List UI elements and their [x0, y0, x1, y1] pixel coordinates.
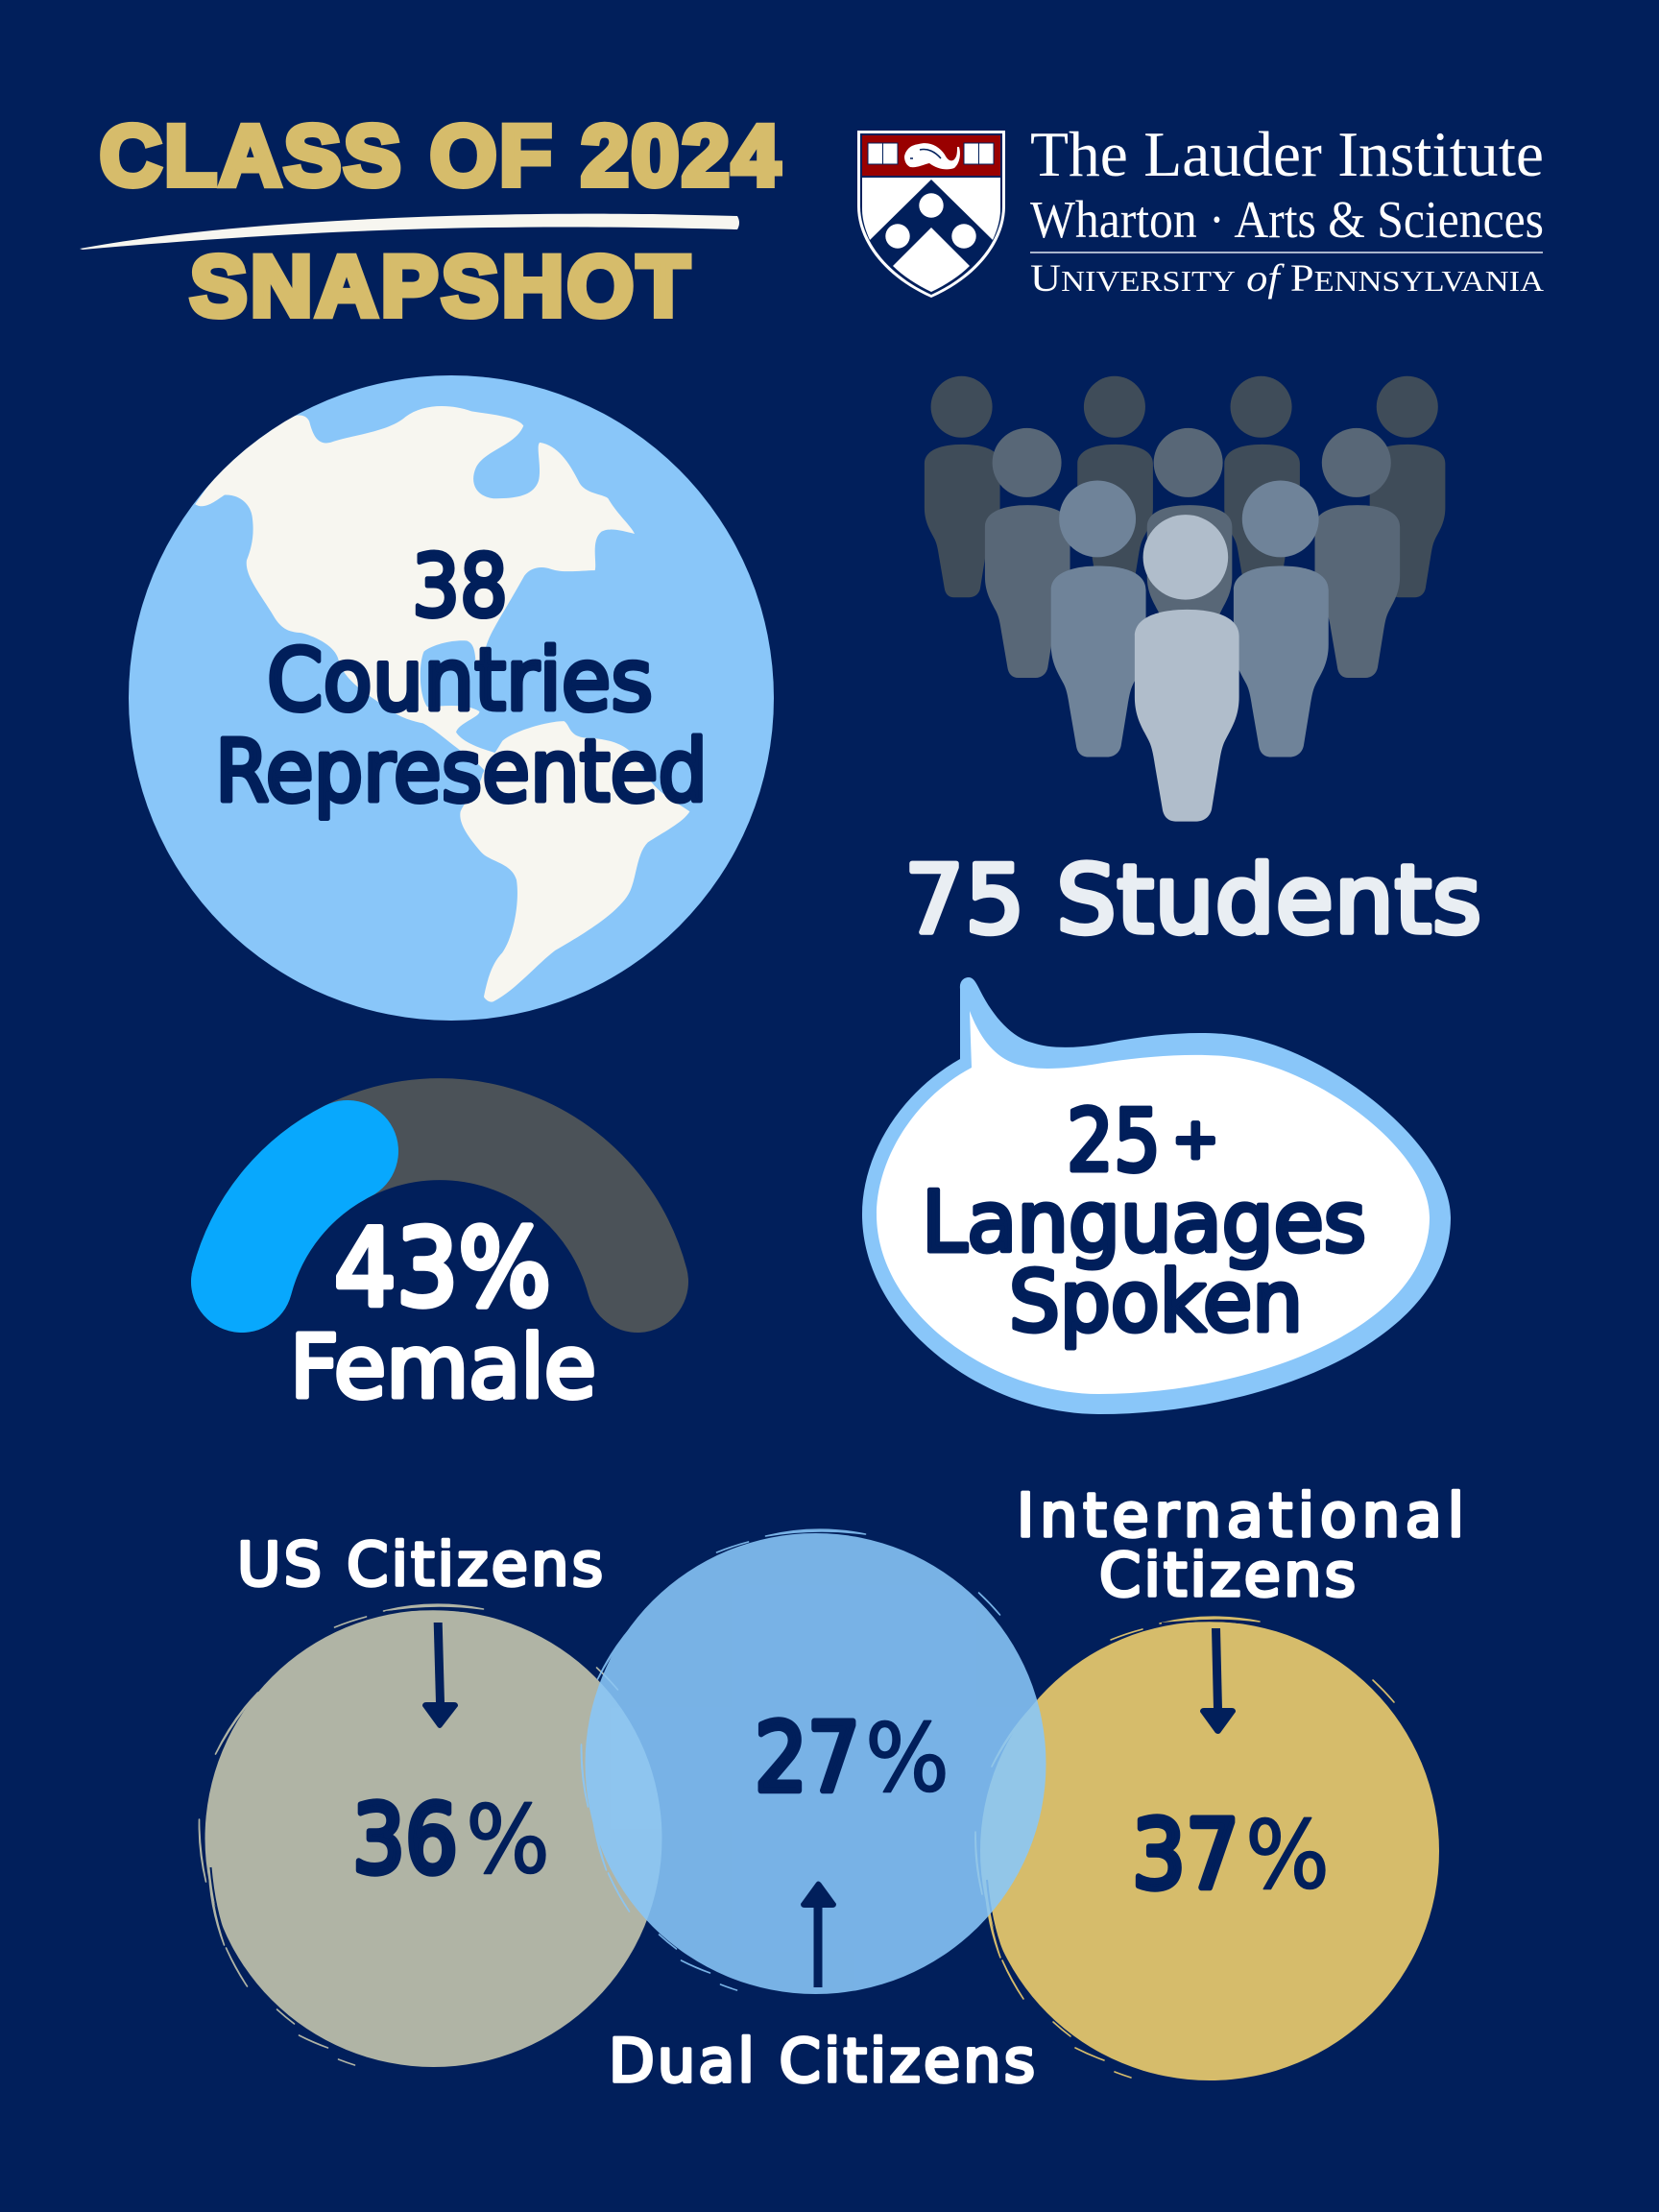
- front-side figures: [1051, 480, 1329, 757]
- text: Spoken: Spoken: [1009, 1253, 1303, 1351]
- text: 25+: 25: [1067, 1091, 1161, 1190]
- gauge track: [242, 1129, 637, 1282]
- panel: languages speech bubble: [862, 977, 1451, 1414]
- text: 36%: %: [466, 1786, 550, 1895]
- title: [80, 108, 780, 334]
- logo schools: Wharton · Arts & Sciences: [1030, 190, 1544, 249]
- icon: continents: [195, 406, 689, 1002]
- panel: citizenship venn diagram: [199, 1480, 1464, 2096]
- text: 27%: %: [865, 1704, 950, 1814]
- text: 37%: %: [1245, 1801, 1330, 1911]
- title line: class of 2024: CLASS OF 2024: [100, 108, 780, 204]
- title line: snapshot: SNAPSHOT: [190, 238, 689, 334]
- middle row figures: [985, 428, 1400, 678]
- panel: students: [904, 376, 1481, 955]
- arrow: dual citizens: [801, 1882, 836, 1987]
- text: Represented: Represented: [215, 721, 708, 821]
- back row figures: [925, 376, 1445, 597]
- text: 25+: +: [1172, 1106, 1219, 1171]
- label: International Citizens: International: [1017, 1480, 1464, 1551]
- icon: group of people: [925, 376, 1445, 822]
- circle: dual citizens: [581, 1529, 1046, 1994]
- arrow: US citizens: [422, 1623, 458, 1728]
- text: 38: 38: [412, 536, 508, 636]
- gauge value: [242, 1151, 348, 1282]
- front figure: [1135, 515, 1239, 822]
- bubble outline: [862, 977, 1451, 1414]
- logo name: The Lauder Institute: [1030, 119, 1544, 190]
- text: 36%: 36: [352, 1785, 458, 1895]
- logo: Lauder Institute: [857, 119, 1545, 300]
- text: 43%: 43%: [334, 1207, 551, 1331]
- text: Female: Female: [290, 1317, 596, 1418]
- text: 75 Students: 75 Students: [904, 846, 1481, 955]
- text: 27%: 27: [755, 1703, 860, 1814]
- brush stroke divider: [80, 214, 739, 250]
- circle: international citizens: [975, 1617, 1439, 2080]
- logo university: UNIVERSITY of PENNSYLVANIA: [1030, 256, 1545, 300]
- text: 37%: [1132, 1800, 1330, 1911]
- label: International Citizens: Citizens: [1099, 1540, 1356, 1610]
- label: Dual Citizens: Dual Citizens: [609, 2026, 1035, 2096]
- text: 27%: [755, 1703, 950, 1814]
- text: 37%: 37: [1132, 1800, 1239, 1911]
- panel: countries globe: [129, 375, 774, 1021]
- circle: US citizens: [199, 1604, 662, 2067]
- icon: Penn shield: [857, 131, 1005, 298]
- panel: female gauge: [242, 1129, 637, 1418]
- arrow: international citizens: [1200, 1628, 1236, 1734]
- label: US Citizens: US Citizens: [237, 1529, 603, 1599]
- text: 36%: [352, 1785, 550, 1895]
- bubble fill: [877, 1011, 1430, 1394]
- label: International Citizens: [1017, 1480, 1464, 1610]
- text: Countries: Countries: [267, 630, 653, 730]
- text: Languages: Languages: [922, 1173, 1366, 1271]
